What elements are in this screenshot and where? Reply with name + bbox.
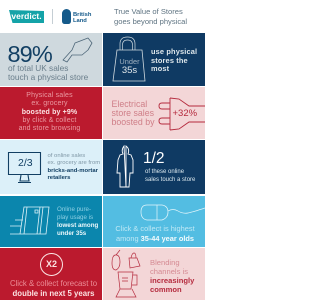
caption: common <box>150 285 182 294</box>
panel: under 35s <box>103 33 205 86</box>
heading <box>114 7 187 26</box>
icon: person <box>116 144 134 188</box>
caption: of online sales <box>48 153 85 159</box>
caption <box>10 279 97 298</box>
caption: retailers <box>48 175 70 181</box>
statistic: 1/2: 1/2 <box>143 150 165 167</box>
caption: and store browsing <box>19 125 80 132</box>
panel: forecast <box>0 248 102 300</box>
caption <box>115 224 195 243</box>
header <box>9 7 187 26</box>
icon: X2 badge <box>40 252 63 276</box>
icon: plug <box>158 98 205 130</box>
caption: sales touch a store <box>145 176 195 182</box>
logo: British Land: Land <box>73 18 87 24</box>
icon: monitor <box>8 152 42 183</box>
caption: use physical <box>151 47 197 56</box>
caption <box>18 92 80 132</box>
divider <box>52 9 53 24</box>
caption: boosted by +9% <box>22 109 77 116</box>
caption: Online pure- <box>57 206 91 213</box>
panel: physical sales <box>0 87 102 139</box>
bag label: 35s <box>122 64 137 76</box>
caption: play usage is <box>57 214 93 221</box>
caption: Click & collect is highest <box>115 224 195 233</box>
caption: increasingly <box>150 276 194 285</box>
caption: under 35s <box>57 230 86 237</box>
bag label <box>119 56 140 76</box>
caption: boosted by <box>112 117 155 127</box>
caption: touch a physical store <box>8 72 88 82</box>
logo: British Land <box>62 9 92 24</box>
logo: British Land: British <box>73 12 91 18</box>
caption <box>112 99 155 127</box>
caption: most <box>151 64 169 73</box>
caption <box>57 206 98 237</box>
heading: True Value of Stores <box>114 7 183 16</box>
icon: blender with mouse and bag <box>112 250 140 298</box>
caption <box>145 168 196 182</box>
panel: online sales <box>0 140 102 194</box>
panel: pure-play <box>0 196 102 247</box>
panel: click and collect age <box>103 196 205 247</box>
caption: Blending <box>150 258 180 266</box>
icon: X2 badge: X2 <box>46 258 57 268</box>
caption: of total UK sales <box>8 63 68 73</box>
statistic: 89%: 89% <box>8 40 52 66</box>
icon: shopping bag <box>112 36 146 82</box>
panel: electrical <box>103 87 205 139</box>
statistic: +32%: +32% <box>172 108 197 119</box>
icon: computer mouse <box>140 204 205 220</box>
caption: channels is <box>150 267 188 276</box>
panel: blending channels <box>103 248 205 300</box>
caption: among 35-44 year olds <box>116 234 194 243</box>
caption: double in next 5 years <box>13 289 94 298</box>
statistic: 2/3: 2/3 <box>18 157 33 169</box>
icon: delivery van <box>10 206 50 234</box>
panel: half of online <box>103 140 205 194</box>
caption: of these online <box>145 169 184 175</box>
caption: Physical sales <box>26 92 73 99</box>
bag label: Under <box>119 56 140 66</box>
caption <box>150 258 194 294</box>
caption: Click & collect forecast to <box>10 279 97 288</box>
caption: ex. grocery are from <box>48 160 100 166</box>
heading: goes beyond physical <box>114 17 187 26</box>
caption: Electrical <box>112 99 147 109</box>
caption <box>48 153 100 181</box>
caption: stores the <box>151 56 188 64</box>
icon: map of UK <box>62 38 92 62</box>
caption <box>8 63 88 82</box>
panel: 89% of sales <box>0 33 102 86</box>
caption <box>151 47 197 73</box>
logo: verdict <box>9 10 44 23</box>
caption: ex. grocery <box>31 100 68 107</box>
caption: store sales <box>112 108 154 118</box>
logo: verdict: verdict. <box>11 11 42 21</box>
caption: lowest among <box>57 222 98 229</box>
caption: bricks-and-mortar <box>48 168 98 174</box>
caption: by click & collect <box>22 117 77 124</box>
